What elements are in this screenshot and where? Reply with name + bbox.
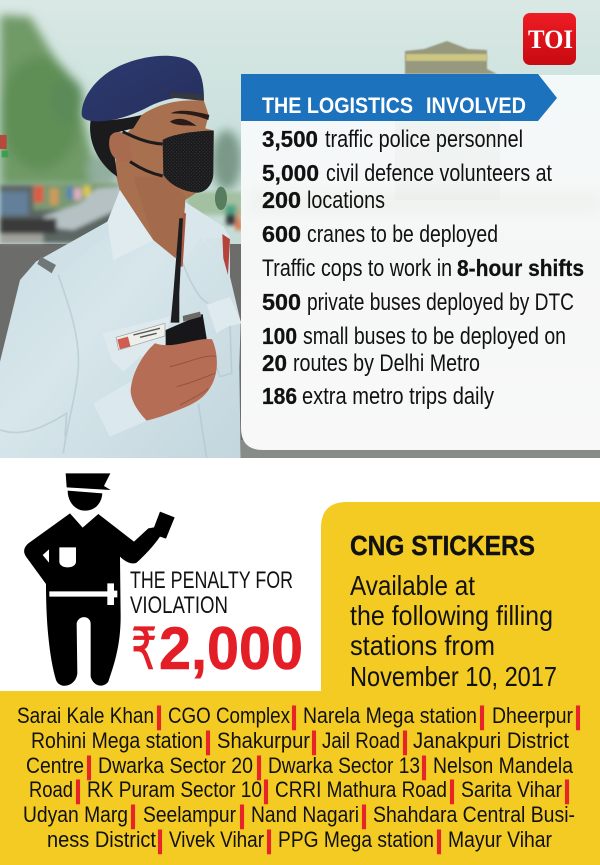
eyebrow and eye	[171, 111, 209, 120]
radio body	[166, 314, 207, 357]
panel: filling stations list	[0, 691, 600, 865]
stations line 1: |	[156, 702, 162, 730]
pocket flap	[207, 297, 242, 333]
faint crowd ghost	[250, 190, 600, 214]
shirt	[0, 190, 241, 458]
TOI logo	[523, 13, 576, 65]
stations line 4: |	[448, 776, 456, 804]
finger lines	[170, 356, 216, 405]
stations line 1	[17, 702, 582, 730]
beret band	[170, 93, 204, 101]
stations line 6: Vivek Vihar	[169, 827, 264, 852]
CNG description	[350, 570, 557, 692]
shoulder strap	[36, 224, 108, 275]
item: metro trips: extra metro trips daily	[302, 383, 494, 410]
item: small buses	[262, 323, 566, 377]
stations line 3: Dwarka Sector 20	[98, 753, 253, 778]
name plate	[116, 323, 165, 350]
stations line 4: |	[564, 776, 570, 804]
item: traffic police	[262, 126, 523, 153]
CNG description: the following filling	[350, 600, 553, 631]
CNG description: stations from	[350, 630, 495, 661]
penalty text	[130, 567, 303, 683]
background monument	[405, 41, 497, 74]
white lower section	[0, 458, 600, 692]
right collar	[182, 202, 230, 263]
stations line 6: |	[266, 826, 272, 854]
item: cranes: 600	[262, 221, 301, 247]
item: cranes: cranes to be deployed	[307, 221, 498, 248]
stations line 2: Jail Road	[322, 728, 400, 753]
penalty label: THE PENALTY FOR	[130, 567, 293, 594]
background trees and road	[0, 15, 600, 458]
stations line 5	[23, 801, 575, 829]
stations line 5: Udyan Marg	[23, 802, 128, 827]
TOI logo: TOI	[528, 25, 573, 54]
penalty amount: 2,000	[159, 615, 303, 682]
stations line 2: Janakpuri District	[413, 728, 570, 753]
stations line 6	[47, 826, 552, 854]
item: civil defence volunteers	[262, 160, 552, 214]
item: civil defence volunteers: 200	[262, 187, 301, 213]
stations line 1: Dheerpur	[492, 703, 573, 728]
penalty amount: ₹	[131, 615, 157, 683]
item: shifts: Traffic cops to work in	[262, 255, 452, 282]
icon: police officer silhouette	[24, 473, 175, 686]
radio antenna	[171, 218, 183, 323]
item: private buses: 500	[262, 289, 301, 315]
stations line 4: RK Puram Sector 10	[87, 777, 262, 802]
stations line 3: Nelson Mandela	[433, 753, 573, 778]
heading banner: the logistics involved: INVOLVED	[426, 93, 526, 118]
shirt folds	[0, 260, 232, 458]
stations line 4: |	[74, 776, 82, 804]
stations line 5: |	[238, 801, 246, 829]
stations line 3	[26, 752, 573, 780]
stations line 2: |	[402, 727, 408, 755]
stations line 5: Shahdara Central Busi-	[373, 802, 575, 827]
hand	[131, 339, 217, 421]
stations line 3: |	[420, 752, 428, 780]
cuff	[93, 382, 148, 437]
CNG heading: CNG STICKERS	[350, 530, 535, 561]
item: civil defence volunteers: civil defence volunteers at	[326, 160, 552, 187]
item: small buses: routes by Delhi Metro	[293, 350, 480, 377]
stations line 5: Seelampur	[143, 802, 236, 827]
stations line 4: |	[262, 776, 270, 804]
stations line 2: |	[310, 727, 318, 755]
stations line 6: |	[156, 826, 164, 854]
item: traffic police: traffic police personnel	[325, 126, 523, 153]
penalty label: VIOLATION	[130, 592, 228, 619]
stations line 4	[29, 776, 570, 804]
stations line 3: Centre	[26, 753, 84, 778]
item: civil defence volunteers: locations	[307, 187, 385, 214]
stations line 4: Sarita Vihar	[461, 777, 562, 802]
left collar	[107, 190, 153, 260]
stations line 3: Dwarka Sector 13	[268, 753, 420, 778]
stations line 6: ness District	[47, 827, 157, 852]
CNG description: Available at	[350, 570, 475, 601]
item: cranes	[262, 221, 498, 248]
beret	[82, 56, 204, 121]
stations line 1: Sarai Kale Khan	[17, 703, 154, 728]
heading banner: the logistics involved	[241, 74, 557, 121]
item: traffic police: 3,500	[262, 126, 318, 152]
mask straps	[123, 132, 163, 176]
mask	[163, 131, 214, 193]
item: metro trips: 186	[262, 383, 297, 409]
stations line 4: CRRI Mathura Road	[275, 777, 447, 802]
stations line 2: Shakurpur	[217, 728, 310, 753]
stations line 1: |	[478, 702, 486, 730]
item: small buses: 20	[262, 350, 287, 376]
left pocket flap	[102, 317, 170, 372]
red lanyard	[222, 234, 230, 275]
item: small buses: 100	[262, 323, 297, 349]
stations line 2	[31, 727, 570, 755]
info panel background	[241, 75, 600, 458]
policeman figure	[0, 56, 242, 458]
stations line 6: |	[436, 826, 442, 854]
stations line 4: Road	[29, 777, 73, 802]
panel: CNG stickers	[321, 502, 600, 692]
item: civil defence volunteers: 5,000	[262, 160, 319, 186]
stations line 1: Narela Mega station	[303, 703, 477, 728]
item: shifts: 8-hour shifts	[457, 255, 584, 281]
ear	[109, 132, 133, 162]
stations line 5: Nand Nagari	[251, 802, 359, 827]
neck and face	[115, 100, 214, 258]
hair	[90, 115, 142, 177]
stations line 2: Rohini Mega station	[31, 728, 203, 753]
stations line 5: |	[360, 801, 368, 829]
penalty label	[130, 567, 293, 619]
stations line 5: |	[130, 801, 136, 829]
stations line 2: |	[204, 727, 212, 755]
stations line 3: |	[86, 752, 92, 780]
stations line 3: |	[256, 752, 262, 780]
heading banner: the logistics involved: THE LOGISTICS	[262, 93, 413, 118]
stations line 6: PPG Mega station	[278, 827, 434, 852]
faint monument ghost	[395, 121, 500, 200]
neck shadow	[133, 177, 185, 258]
stations line 6: Mayur Vihar	[448, 827, 552, 852]
shoulder number	[37, 257, 56, 273]
stations line 1: |	[574, 702, 582, 730]
CNG description: November 10, 2017	[350, 661, 557, 692]
stations line 1: CGO Complex	[168, 703, 291, 728]
stations line 1: |	[290, 702, 298, 730]
photo: traffic policeman wearing mask	[0, 0, 600, 458]
logistics list	[262, 126, 584, 410]
